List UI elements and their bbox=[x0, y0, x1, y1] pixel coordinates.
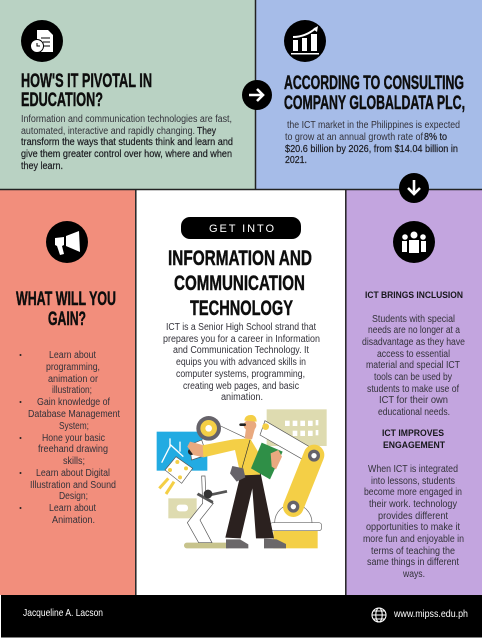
text block: pivotal body: They bbox=[197, 126, 216, 137]
text block: ICT description bbox=[163, 322, 320, 403]
list: gains: illustration; bbox=[52, 385, 92, 396]
text block: ICT description: equips you with advanced skills in bbox=[176, 357, 306, 368]
list: gains: Illustration and Sound bbox=[30, 480, 116, 491]
text block: engagement: same things in different bbox=[367, 557, 459, 568]
list: gains: Gain knowledge of bbox=[37, 397, 110, 408]
arrow: down bbox=[399, 173, 429, 203]
subheading: engagement: ENGAGEMENT bbox=[383, 440, 445, 451]
text block: inclusion: access to essential bbox=[377, 349, 450, 360]
text block: market body bbox=[285, 120, 460, 166]
text block: engagement: provides different bbox=[378, 511, 448, 522]
panel: what will you gain bbox=[0, 190, 135, 595]
text block: pivotal body bbox=[21, 114, 233, 172]
list: gains bbox=[20, 350, 120, 526]
text block: market body: the ICT market in the Philippines is expected bbox=[287, 120, 460, 131]
text block: engagement bbox=[363, 464, 464, 580]
footer: author name: Jacqueline A. Lacson bbox=[23, 607, 103, 619]
text block: inclusion: students to make use of bbox=[367, 384, 459, 395]
list: gains: Learn about bbox=[49, 503, 96, 514]
text block: pivotal body: transform the ways that students think and learn and bbox=[21, 137, 233, 148]
text block: pivotal body: they learn. bbox=[21, 161, 63, 172]
text block: ICT description: creating web pages, and basic bbox=[183, 381, 299, 392]
subheading: inclusion: ICT BRINGS INCLUSION bbox=[365, 290, 463, 301]
footer: website: www.mipss.edu.ph bbox=[393, 608, 468, 620]
list: gains: Learn about Digital bbox=[36, 468, 110, 479]
footer bbox=[1, 595, 482, 638]
text block: engagement: opportunities to make it bbox=[366, 522, 460, 533]
list: gains: System; bbox=[59, 421, 89, 432]
text block: pivotal body: give them greater control over how, where and when bbox=[21, 149, 232, 160]
heading: gain: WHAT WILL YOU bbox=[16, 288, 116, 310]
text block: inclusion: Students with special bbox=[372, 314, 455, 325]
text block: engagement: When ICT is integrated bbox=[368, 464, 458, 475]
pill: get into bbox=[181, 217, 301, 239]
list: gains: freehand drawing bbox=[38, 444, 108, 455]
title: information and communication technology bbox=[168, 247, 312, 320]
text block: inclusion: ICT for their own bbox=[379, 395, 448, 406]
icon: group of people bbox=[393, 221, 435, 263]
heading: pivotal: EDUCATION? bbox=[21, 89, 103, 111]
heading: gain: GAIN? bbox=[48, 308, 86, 330]
text block: inclusion: needs are no longer at a bbox=[368, 325, 460, 336]
text block: engagement: their work. technology bbox=[369, 499, 457, 510]
text block: market body: to grow at an annual growth rate of bbox=[285, 132, 423, 143]
text block: inclusion bbox=[362, 314, 465, 418]
list: gains: Database Management bbox=[28, 409, 120, 420]
icon: document and clock bbox=[21, 20, 63, 62]
list: gains: Hone your basic bbox=[42, 433, 105, 444]
text block: engagement: into lessons, students bbox=[371, 476, 455, 487]
list: gains: Animation. bbox=[52, 515, 95, 526]
text block: pivotal body: automated, interactive and rapidly changing. bbox=[21, 126, 195, 137]
subheading: engagement: ICT IMPROVES bbox=[382, 428, 444, 439]
title: information and communication technology: INFORMATION AND bbox=[168, 247, 312, 270]
text block: engagement: terms of teaching the bbox=[371, 546, 455, 557]
arrow: right bbox=[242, 80, 272, 110]
text block: engagement: ways. bbox=[402, 569, 425, 580]
text block: engagement: more fun and enjoyable in bbox=[363, 534, 464, 545]
panel: how it is pivotal bbox=[0, 0, 256, 190]
text block: engagement: become more engaged in bbox=[364, 487, 462, 498]
text block: inclusion: material and special ICT bbox=[366, 360, 460, 371]
list: gains: animation or bbox=[48, 374, 99, 385]
text block: ICT description: and Communication Technology. It bbox=[173, 345, 309, 356]
pill: get into: GET INTO bbox=[209, 223, 274, 235]
icon: megaphone bbox=[46, 221, 88, 263]
text block: pivotal body: Information and communication technologies are fast, bbox=[21, 114, 232, 125]
illustration: worker with robot arms bbox=[157, 409, 327, 548]
text block: ICT description: computer systems, programming, bbox=[176, 369, 305, 380]
icon: growth chart bbox=[284, 20, 326, 62]
text block: market body: $20.6 billion by 2026, from $14.04 billion in bbox=[285, 144, 458, 155]
text block: inclusion: educational needs. bbox=[378, 407, 450, 418]
text block: ICT description: ICT is a Senior High School strand that bbox=[166, 322, 316, 333]
heading: pivotal bbox=[21, 70, 152, 111]
list: gains: Learn about bbox=[49, 350, 96, 361]
text block: ICT description: animation. bbox=[221, 392, 263, 403]
heading: according to GlobalData bbox=[284, 72, 465, 114]
text block: market body: 2021. bbox=[285, 155, 307, 166]
icon: globe bbox=[372, 608, 386, 622]
heading: gain bbox=[16, 288, 116, 330]
list: gains: Design; bbox=[59, 491, 88, 502]
list: gains: programming, bbox=[46, 362, 100, 373]
text block: inclusion: disadvantage as they have bbox=[362, 337, 465, 348]
text block: inclusion: tools can be used by bbox=[374, 372, 452, 383]
heading: pivotal: HOW'S IT PIVOTAL IN bbox=[21, 70, 152, 92]
panel: ICT inclusion and engagement bbox=[346, 190, 482, 595]
panel: market growth bbox=[256, 0, 482, 190]
text block: ICT description: prepares you for a career in Information bbox=[163, 334, 320, 345]
title: information and communication technology: COMMUNICATION bbox=[174, 272, 305, 295]
text block: market body: 8% to bbox=[424, 132, 447, 143]
list: gains: skills; bbox=[63, 456, 85, 467]
panel: get into ICT bbox=[137, 190, 346, 595]
subheading: engagement bbox=[382, 428, 445, 451]
title: information and communication technology: TECHNOLOGY bbox=[190, 297, 293, 320]
